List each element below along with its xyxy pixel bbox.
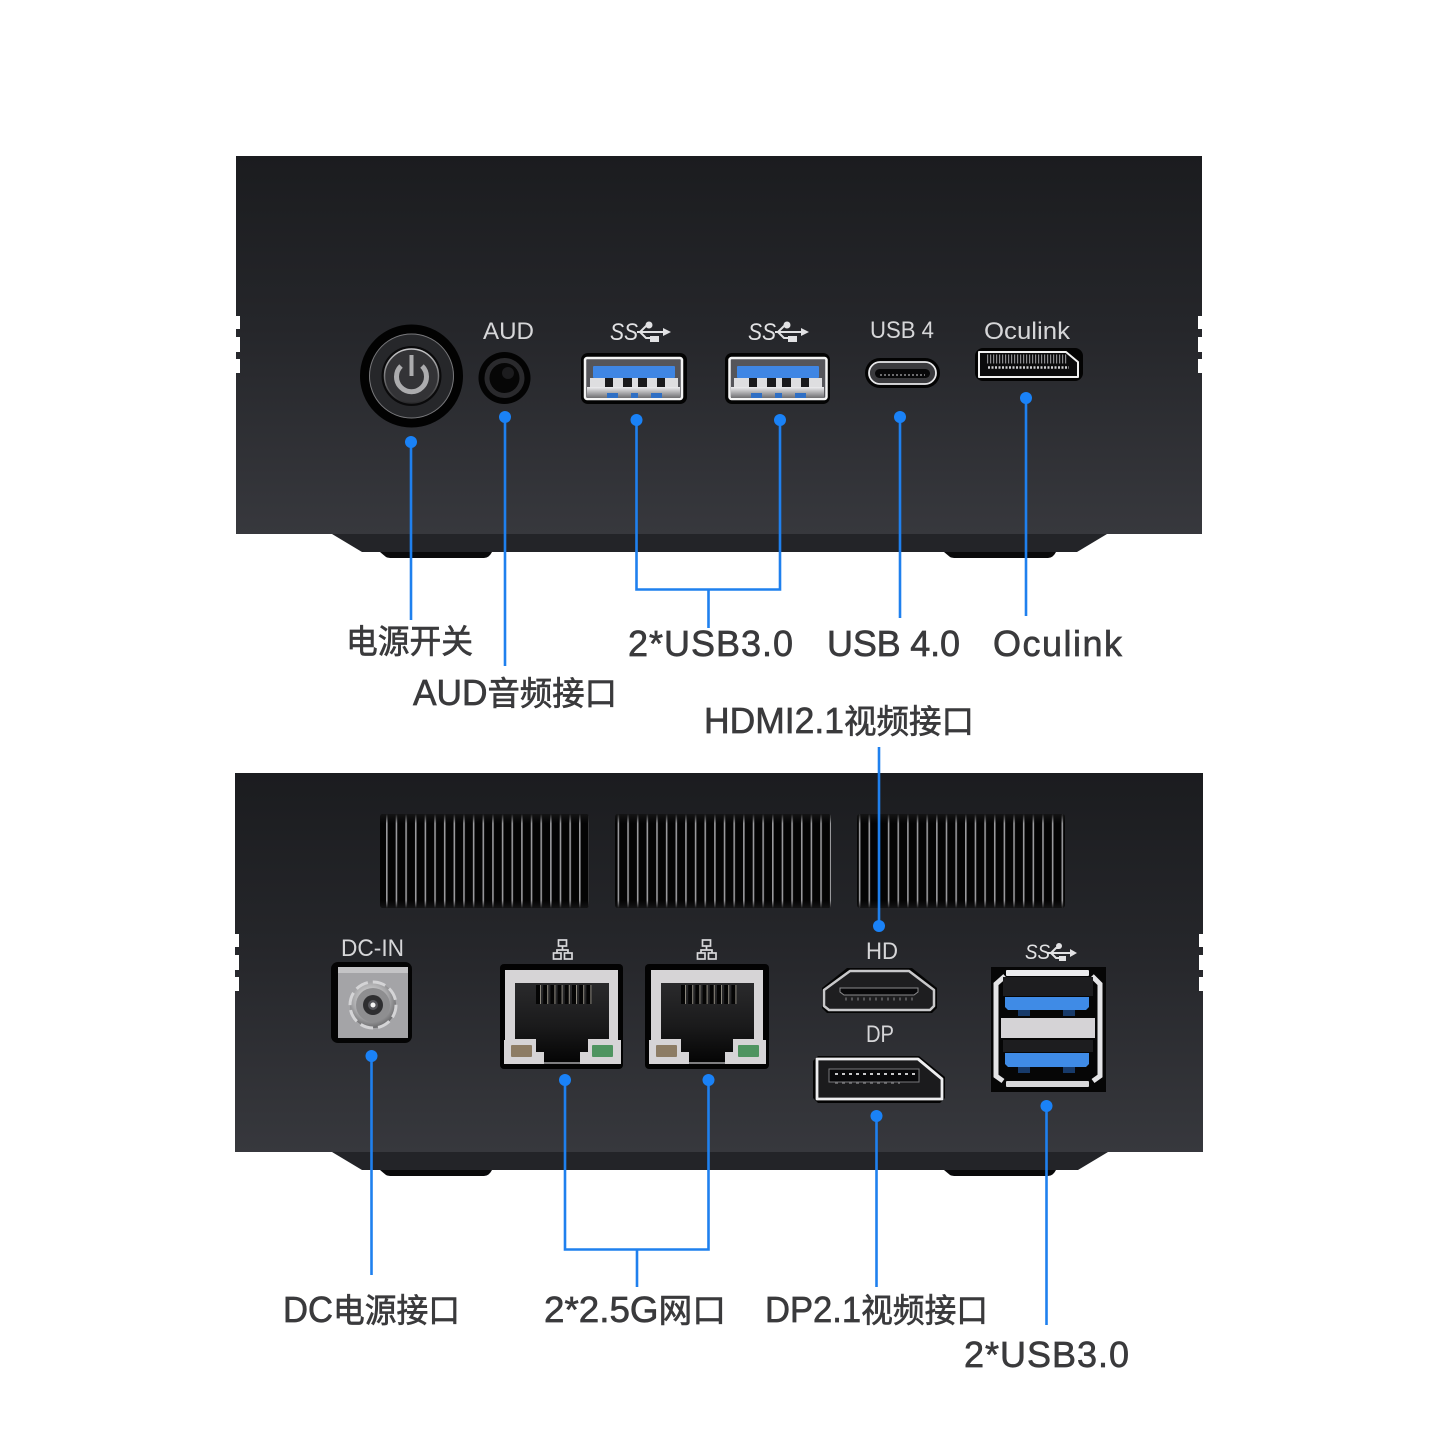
callout line: DP bbox=[870, 1110, 882, 1287]
vent: right bbox=[857, 814, 1065, 908]
port: USB-C bbox=[865, 358, 940, 388]
icon: SuperSpeed logo bbox=[748, 319, 809, 346]
callout bracket: two LAN ports bbox=[559, 1074, 714, 1287]
label: power switch: 电源开关 bbox=[346, 623, 473, 660]
callout line: Oculink bbox=[1020, 392, 1032, 616]
icon: SuperSpeed logo: SS bbox=[748, 319, 776, 346]
label: USB 4.0: USB 4.0 bbox=[827, 623, 960, 664]
device rear face bbox=[235, 773, 1203, 1152]
port: USB 3.0 bbox=[725, 353, 830, 404]
label: 2*USB3.0: 2*USB3.0 bbox=[628, 623, 793, 664]
icon: SuperSpeed logo: SS bbox=[1025, 941, 1050, 964]
label: DP2.1 video port: DP2.1视频接口 bbox=[765, 1289, 988, 1330]
label: HDMI2.1 video port: HDMI2.1视频接口 bbox=[704, 700, 974, 741]
callouts: front ports bbox=[405, 392, 1032, 666]
HD label: HD bbox=[866, 938, 898, 965]
port: USB 3.0 bbox=[581, 353, 687, 404]
device base and feet bbox=[332, 1152, 1108, 1176]
label: DC power port: DC电源接口 bbox=[283, 1289, 460, 1330]
callout line: DC power bbox=[366, 1050, 378, 1275]
port: RJ45 LAN 1 bbox=[500, 964, 623, 1069]
port: RJ45 LAN 2 bbox=[645, 964, 769, 1069]
port: HDMI bbox=[822, 968, 937, 1013]
panel: front of mini PC bbox=[236, 156, 1202, 558]
callout line: HDMI bbox=[873, 747, 885, 932]
port: dual USB 3.0 bbox=[991, 967, 1106, 1092]
callout line: audio bbox=[499, 411, 511, 666]
port: DisplayPort bbox=[813, 1056, 945, 1103]
vent: left bbox=[380, 814, 589, 908]
port: DC jack bbox=[331, 962, 412, 1043]
label: AUD audio port: AUD音频接口 bbox=[413, 672, 617, 713]
device front face bbox=[236, 156, 1202, 534]
DP label: DP bbox=[866, 1021, 894, 1048]
callout line: rear USB bbox=[1040, 1100, 1052, 1325]
port: Oculink bbox=[975, 348, 1083, 381]
callouts: rear ports bbox=[366, 747, 1052, 1325]
callout line: USB 4.0 bbox=[894, 411, 906, 618]
vent: centre bbox=[615, 814, 831, 908]
icon: SuperSpeed logo: SS bbox=[610, 319, 638, 346]
Oculink label: Oculink bbox=[984, 318, 1071, 345]
callout line: power bbox=[405, 436, 417, 620]
DC-IN label: DC-IN bbox=[341, 935, 404, 962]
icon: SuperSpeed logo bbox=[1025, 941, 1077, 964]
panel: rear of mini PC bbox=[235, 773, 1203, 1176]
icon: power button bbox=[364, 329, 458, 423]
label: 2*2.5G LAN: 2*2.5G网口 bbox=[544, 1289, 726, 1330]
USB 4 label: USB 4 bbox=[870, 317, 934, 344]
AUD label: AUD bbox=[483, 318, 534, 345]
label: Oculink: Oculink bbox=[993, 623, 1123, 664]
callout bracket: two USB 3.0 bbox=[630, 414, 786, 628]
icon: network bbox=[698, 940, 716, 959]
icon: audio jack bbox=[478, 352, 530, 404]
icon: network bbox=[554, 940, 572, 959]
label: rear 2*USB3.0: 2*USB3.0 bbox=[964, 1334, 1129, 1375]
device base and feet bbox=[332, 534, 1107, 558]
icon: SuperSpeed logo bbox=[610, 319, 671, 346]
